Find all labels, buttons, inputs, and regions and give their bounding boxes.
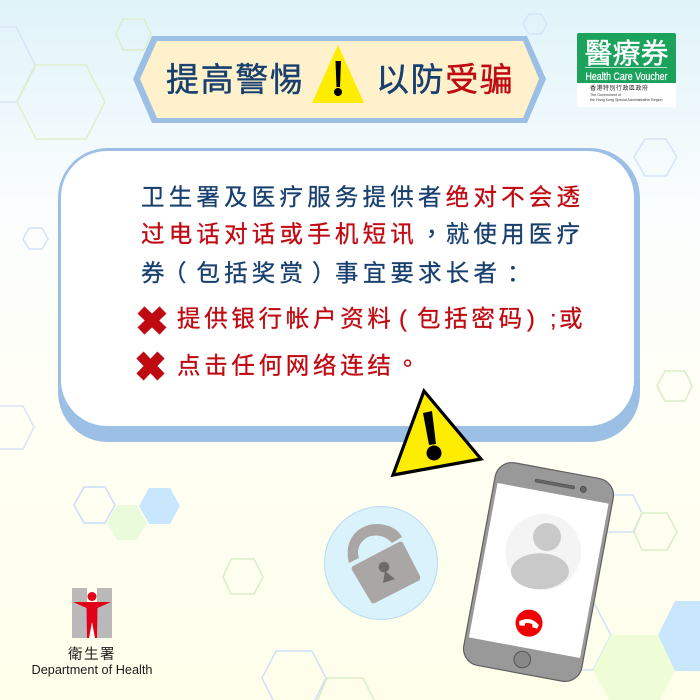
intro text: 卫生署及医疗服务提供者绝对不会透: [141, 184, 584, 210]
padlock shackle: [348, 524, 402, 563]
intro text: ：: [507, 260, 535, 286]
bullet one: ;: [550, 306, 557, 332]
phone screen: [469, 483, 609, 658]
intro text: 就使用医疗: [446, 221, 584, 247]
intro text: 券: [141, 260, 169, 286]
icon: red cross: [140, 355, 161, 377]
title text continued: 以防受骗: [376, 61, 514, 98]
icon: smartphone: [461, 460, 616, 684]
camera: [580, 486, 587, 493]
health care voucher logo: the Hong Kong Special Administrative Region: [590, 98, 663, 102]
health care voucher logo: [577, 32, 676, 107]
intro text: ，: [426, 214, 454, 240]
home button: [513, 650, 532, 669]
bullet two: 点击任何网络连结: [177, 352, 395, 378]
bullet one: 提供银行帐户资料: [177, 306, 395, 332]
bullet two: [140, 344, 426, 378]
icon: padlock in circle: [324, 506, 438, 620]
padlock body: [352, 542, 420, 603]
icon: red cross: [141, 310, 163, 331]
icon: warning triangle: [393, 391, 481, 475]
department name english: Department of Health: [32, 662, 152, 677]
hang up button: [513, 607, 545, 639]
bullet two: 。: [403, 344, 426, 370]
department of health logo: [32, 588, 152, 677]
health care voucher logo: 香港特別行政區政府: [590, 83, 649, 92]
main message panel: [58, 148, 640, 442]
intro text: 包括奖赏: [196, 260, 307, 286]
logo mark: [72, 588, 112, 638]
title warning icon: [312, 45, 364, 103]
title banner: [133, 36, 546, 123]
bullet one: ): [527, 306, 535, 332]
bullet one: 或: [559, 306, 582, 332]
health care voucher logo: Health Care Voucher: [586, 71, 668, 83]
intro text: （: [163, 260, 191, 286]
keyhole: [379, 562, 395, 583]
speaker: [535, 479, 575, 489]
bullet one: 包括密码: [417, 306, 526, 332]
intro text: ）: [312, 260, 340, 286]
health care voucher logo: 醫療券: [584, 32, 669, 72]
bullet one: (: [399, 306, 407, 332]
contact avatar: [506, 514, 581, 590]
intro text: 事宜要求长者: [335, 260, 501, 286]
health care voucher logo: The Government of: [590, 93, 621, 97]
title text: 提高警惕: [166, 61, 304, 98]
intro text: 过电话对话或手机短讯: [141, 221, 418, 247]
department name chinese: 衛生署: [68, 643, 116, 664]
bullet one: [141, 306, 582, 332]
intro text: [141, 184, 584, 286]
